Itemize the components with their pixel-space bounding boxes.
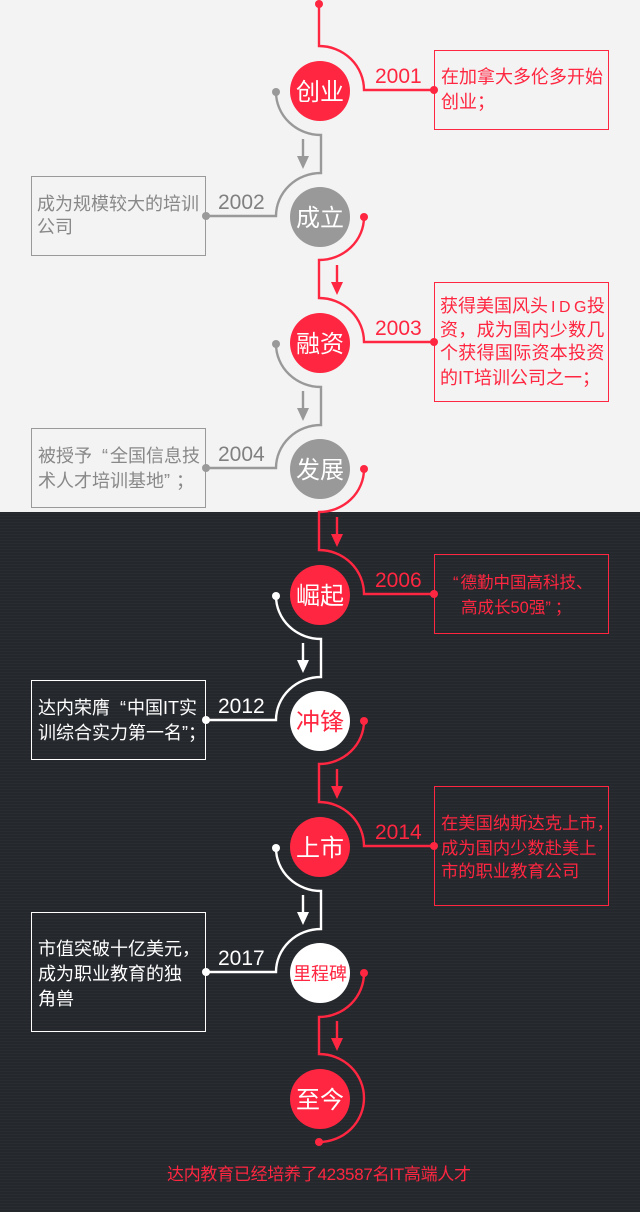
milestone 2006 [290,465,608,634]
milestone 2003: 的IT培训公司之一； [440,368,600,388]
milestone 2014: 上市 [296,835,344,862]
milestone 2003: 资，成为国内少数几 [440,320,605,340]
milestone 2003 [290,213,608,402]
milestone 2003: 2003 [375,317,422,340]
milestone 2014: 市的职业教育公司 [441,861,579,881]
milestone: present [290,969,368,1146]
milestone 2017 [32,844,350,1032]
milestone 2006: 高成长50强”； [461,598,571,617]
milestone: present: 至今 [296,1087,344,1114]
milestone 2006: 2006 [375,569,422,592]
milestone 2001 [290,0,608,130]
milestone 2004: 术人才培训基地” ； [38,471,194,491]
milestone 2001: 2001 [375,65,422,88]
milestone 2017: 里程碑 [293,964,347,984]
milestone 2017: 成为职业教育的独 [38,964,182,984]
milestone 2002: 成为规模较大的培训 [37,194,199,214]
milestone 2004: 发展 [296,457,344,484]
milestone 2001: 在加拿大多伦多开始 [441,66,603,87]
milestone 2003: 融资 [296,331,344,358]
milestone 2002: 2002 [218,191,265,214]
milestone 2003: 投 [587,296,605,316]
milestone 2002 [32,88,350,256]
milestone 2006: “德勤中国高科技、 [453,573,592,592]
milestone 2004: 2004 [218,443,265,466]
milestone 2012: 达内荣膺 “中国IT实 [38,698,197,718]
milestone 2004: 被授予 “全国信息技 [38,446,200,466]
milestone 2012: 2012 [218,695,265,718]
closing statement: 达内教育已经培养了423587名IT高端人才 [167,1165,471,1184]
milestone 2002: 公司 [37,217,73,237]
milestone 2006: 崛起 [296,583,344,610]
milestone 2017: 角兽 [38,989,74,1009]
milestone 2001: 创业； [441,92,495,112]
milestone 2004 [32,340,350,508]
milestone 2012: 训综合实力第一名”； [38,723,206,743]
milestone 2014 [290,717,614,906]
milestone 2014: 成为国内少数赴美上 [441,838,597,858]
milestone 2012 [32,592,350,760]
milestone 2012: 冲锋 [296,709,344,736]
milestone 2003: 个获得国际资本投资 [440,343,605,363]
milestone 2002: 成立 [296,205,344,232]
milestone 2001: 创业 [296,79,344,106]
milestone 2003: 获得美国风头IDG [440,296,590,316]
milestone 2014: 在美国纳斯达克上市， [441,813,614,833]
milestone 2017: 2017 [218,947,265,970]
milestone 2014: 2014 [375,821,422,844]
milestone 2017: 市值突破十亿美元， [38,939,200,959]
